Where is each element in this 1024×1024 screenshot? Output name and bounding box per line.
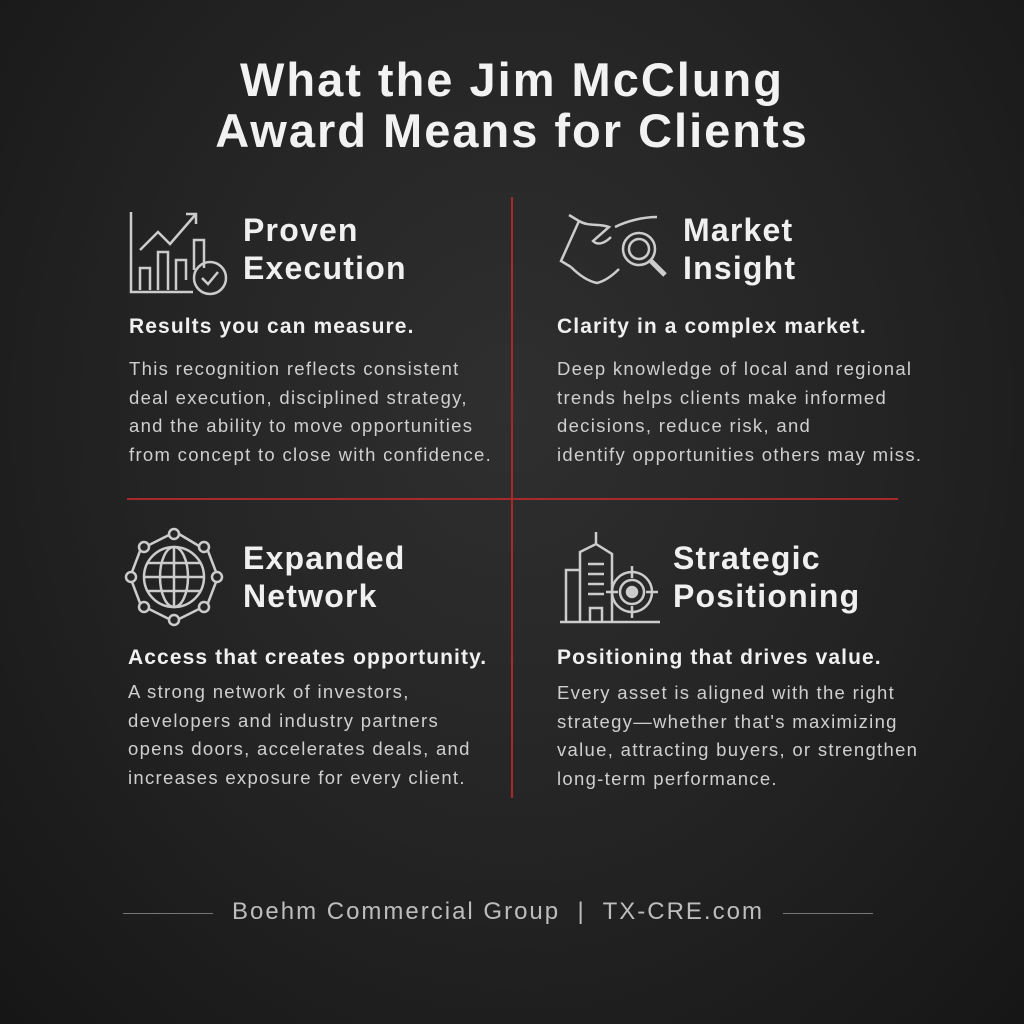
panel: strategic positioning xyxy=(557,532,918,789)
heading xyxy=(243,212,407,286)
body text xyxy=(557,682,918,789)
title xyxy=(215,53,809,157)
heading: Expanded xyxy=(243,540,406,576)
heading: Strategic xyxy=(673,540,821,576)
body text: A strong network of investors, xyxy=(128,681,410,702)
body text: and the ability to move opportunities xyxy=(129,415,473,436)
body text: developers and industry partners xyxy=(128,710,439,730)
icon: handshake with magnifier xyxy=(560,214,667,284)
icon: globe network xyxy=(124,528,224,626)
body text: Deep knowledge of local and regional xyxy=(557,358,912,379)
body text: trends helps clients make informed xyxy=(557,386,887,408)
body text: long-term performance. xyxy=(557,768,778,788)
heading: Execution xyxy=(243,250,407,286)
icon: chart with check xyxy=(130,212,228,296)
body text xyxy=(557,358,922,465)
horizontal divider xyxy=(127,498,898,500)
title: Award Means for Clients xyxy=(215,104,809,157)
title: What the Jim McClung xyxy=(240,53,784,106)
panel: expanded network xyxy=(124,528,487,788)
body text: This recognition reflects consistent xyxy=(129,358,460,379)
body text: decisions, reduce risk, and xyxy=(557,415,811,436)
body text: identify opportunities others may miss. xyxy=(557,444,922,464)
body text xyxy=(129,358,492,465)
body text: strategy—whether that's maximizing xyxy=(557,710,898,732)
body text: value, attracting buyers, or strengthen xyxy=(557,739,918,760)
body text: deal execution, disciplined strategy, xyxy=(129,386,468,408)
body text xyxy=(128,681,471,788)
heading: Positioning xyxy=(673,578,860,614)
body text: Every asset is aligned with the right xyxy=(557,682,895,703)
body text: from concept to close with confidence. xyxy=(129,444,492,464)
panel: proven execution xyxy=(129,212,492,465)
subheading: Clarity in a complex market. xyxy=(557,315,867,338)
heading xyxy=(673,540,860,614)
heading xyxy=(683,212,796,286)
heading: Network xyxy=(243,578,378,614)
heading xyxy=(243,540,406,614)
body text: increases exposure for every client. xyxy=(128,766,466,788)
subheading: Positioning that drives value. xyxy=(557,646,882,669)
icon: building with target xyxy=(560,532,660,624)
heading: Proven xyxy=(243,212,359,248)
subheading: Access that creates opportunity. xyxy=(128,646,487,669)
vertical divider xyxy=(511,197,513,798)
subheading: Results you can measure. xyxy=(129,315,415,338)
panel: market insight xyxy=(557,212,922,465)
heading: Market xyxy=(683,212,793,248)
heading: Insight xyxy=(683,250,796,286)
footer: Boehm Commercial Group | TX-CRE.com xyxy=(232,898,764,925)
body text: opens doors, accelerates deals, and xyxy=(128,738,471,759)
